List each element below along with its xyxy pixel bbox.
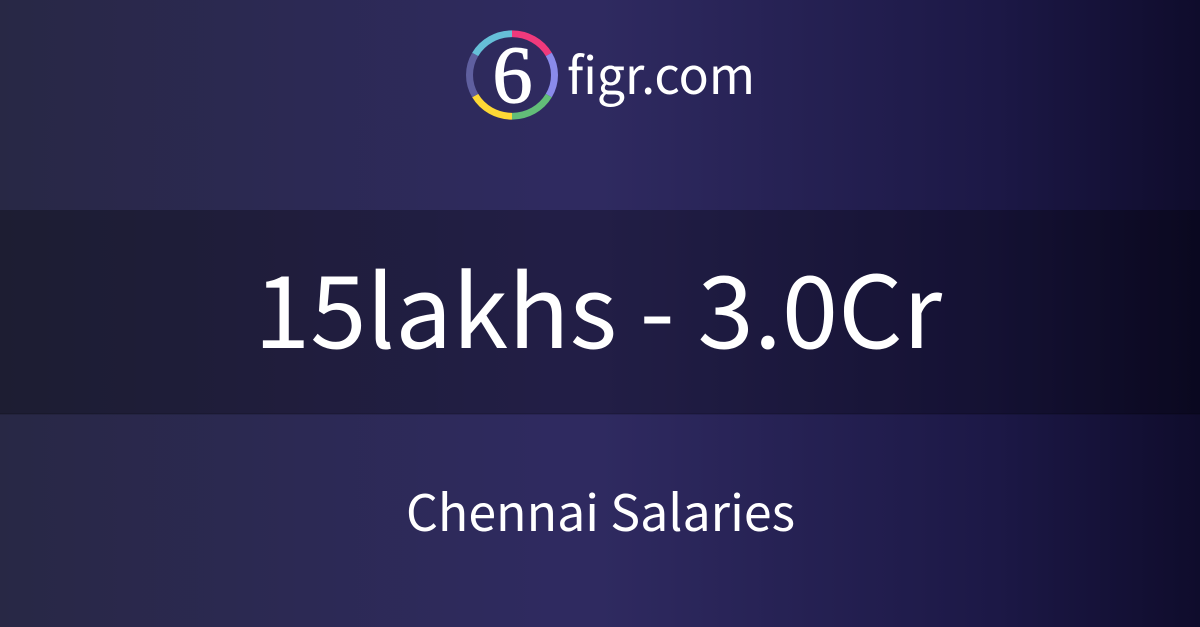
logo wordmark: figr.com xyxy=(567,35,755,109)
icon: segmented ring with six: 6 xyxy=(492,29,532,120)
salary range headline: 15lakhs - 3.0Cr xyxy=(254,232,942,377)
logo xyxy=(470,29,755,120)
dark central band xyxy=(0,210,1200,414)
icon: segmented ring with six xyxy=(470,29,554,120)
subtitle: Chennai Salaries xyxy=(406,474,795,546)
